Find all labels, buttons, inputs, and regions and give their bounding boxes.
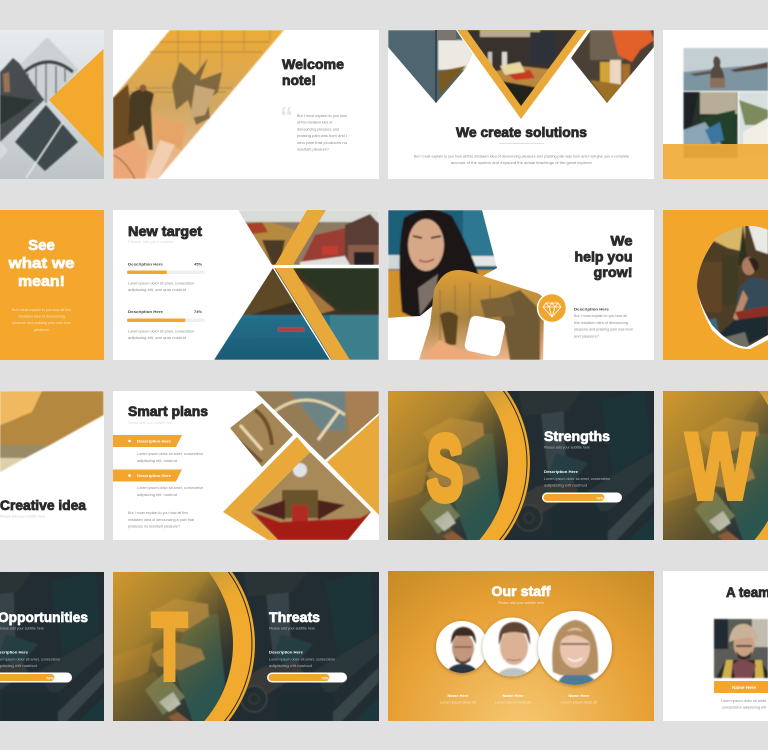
heading: what we xyxy=(7,255,74,272)
photo: white fence and foliage xyxy=(739,92,768,158)
letter S: S xyxy=(427,418,463,520)
panel: we create solutions slide xyxy=(388,30,654,179)
heading: We create solutions xyxy=(456,124,587,140)
text block: quote: who pain that produces no xyxy=(297,141,347,145)
names: Lorem ipsum dolor sit xyxy=(495,700,531,704)
icon: diamond in circle xyxy=(538,294,566,322)
heading: Opportunities xyxy=(0,609,88,625)
item 1: Description Here xyxy=(137,438,172,444)
shape: orange stripe bottom xyxy=(275,268,350,360)
photo: town rooftops xyxy=(238,210,379,265)
shape: white blob ring xyxy=(697,227,768,349)
text block: and pleasure? xyxy=(574,334,599,338)
heading: grow! xyxy=(594,264,632,280)
subtitle: Please add your subtitle here xyxy=(0,514,45,518)
panel: creative idea slide xyxy=(0,391,104,540)
photo: left triangle xyxy=(388,30,478,105)
shape: orange overlay band xyxy=(663,144,768,179)
item 1 xyxy=(113,435,204,463)
text block: pleasure and praising pain was born xyxy=(12,321,71,325)
text block: Lorem ipsum dolor sit amet, xyxy=(721,699,767,703)
shape: white rounded square xyxy=(464,315,506,357)
description: adipiscing elit nostrud xyxy=(269,664,312,668)
panel: our staff slide xyxy=(388,571,654,721)
text block: But I must explain to you how all this xyxy=(12,308,71,312)
heading: Creative idea xyxy=(0,497,86,513)
progress item 45%: Description Here xyxy=(128,262,164,266)
panel: photo collage slide xyxy=(663,30,768,179)
heading: mean! xyxy=(18,273,65,290)
text block: quote: But I must explain to you how xyxy=(297,114,347,118)
text block: quote: praising pain was born and I xyxy=(297,134,347,138)
shape: orange band xyxy=(223,437,310,540)
shape: orange triangle xyxy=(49,49,104,158)
heading: See xyxy=(28,237,55,254)
names: Lorem ipsum dolor sit xyxy=(561,700,597,704)
text block: produces no resultant pleasure? xyxy=(128,524,180,528)
letter T: T xyxy=(152,594,187,699)
panel: strengths slide xyxy=(388,391,654,540)
progress bar: 76% xyxy=(596,496,604,500)
photo: man in forest xyxy=(695,224,768,350)
item 2: Description Here xyxy=(137,473,172,478)
heading: We xyxy=(610,232,633,248)
item 2: adipiscing elit, nostrud xyxy=(137,493,177,497)
portrait: man with hat xyxy=(714,619,768,678)
progress bar xyxy=(0,672,72,682)
shape: gold chevron xyxy=(457,30,587,119)
progress bar xyxy=(267,672,347,682)
text block xyxy=(12,308,71,332)
text block: But I must explain to you how all this mistaken idea of denouncing pleasure and praising pain was born and I will give you a complete xyxy=(414,154,629,158)
text block: mistaken idea of denouncing xyxy=(18,314,65,318)
text block: But I must explain to you how all xyxy=(574,314,627,318)
item 2 xyxy=(113,470,204,497)
heading: Threats xyxy=(269,609,320,625)
heading: New target xyxy=(128,223,202,239)
progress item 74% xyxy=(127,309,205,340)
panel: a team slide xyxy=(663,571,768,721)
subtitle: Please add your subtitle xyxy=(128,240,174,244)
progress item 45%: adipiscing elit, sed quia nostrud xyxy=(128,288,186,292)
panel: new target slide xyxy=(113,210,379,360)
item 1: adipiscing elit, nostrud xyxy=(137,459,177,463)
progress item 74%: Description Here xyxy=(128,309,164,314)
text block: mistaken idea of denouncing a pain that xyxy=(128,518,195,522)
shape: orange stripe top xyxy=(275,210,326,265)
panel: opportunities slide xyxy=(0,572,104,721)
names: Name Here xyxy=(448,693,469,698)
subtitle: Please add your subtitle here xyxy=(498,601,544,605)
progress bar xyxy=(542,492,622,502)
panel: we help you grow slide xyxy=(388,210,654,360)
description xyxy=(544,469,611,488)
panel: threats slide xyxy=(113,572,379,721)
photo: cathedral arches xyxy=(230,403,295,468)
progress bar: 76% xyxy=(46,676,54,680)
photo: orange tinted blob xyxy=(415,268,550,360)
progress item 74%: 74% xyxy=(194,309,202,314)
photo: cathedral nave xyxy=(250,452,372,542)
text block xyxy=(574,306,633,338)
names: Lorem ipsum dolor sit xyxy=(440,700,476,704)
description: Description Here xyxy=(544,469,579,474)
subtitle: Please add your subtitle here xyxy=(544,446,590,450)
heading xyxy=(574,232,633,280)
heading: Welcome xyxy=(282,56,344,72)
photo: food stall centre triangle xyxy=(467,30,577,110)
text block xyxy=(128,511,195,528)
names: Name Here xyxy=(503,693,524,698)
description: Description Here xyxy=(269,650,304,654)
progress item 45% xyxy=(127,262,205,292)
text block: Description Here xyxy=(574,306,610,312)
label band: Name Here xyxy=(732,685,756,690)
text block: this mistaken idea of denouncing xyxy=(574,321,628,325)
text block: pleasure xyxy=(34,328,49,332)
text block: quote: denouncing pleasure and xyxy=(297,128,339,132)
heading xyxy=(7,237,74,290)
names xyxy=(440,693,597,704)
description: Lorem ipsum dolor sit amet, consectetur xyxy=(544,477,611,481)
photo: stone stack xyxy=(684,48,768,91)
progress item 74%: adipiscing elit, sed quia nostrud xyxy=(128,336,186,340)
text block xyxy=(414,154,629,165)
progress item 45%: Lorem ipsum dolor sit amet, consectetur xyxy=(128,282,195,286)
panel: see what we mean slide xyxy=(0,210,104,360)
text block xyxy=(721,699,767,710)
label band xyxy=(714,681,768,693)
photo: cathedral ceiling xyxy=(255,391,379,461)
shape: orange triangle right xyxy=(327,415,379,515)
panel: harbour bridge slide xyxy=(0,30,104,179)
panel: man on rocks slide xyxy=(663,210,768,360)
progress item 74%: Lorem ipsum dolor sit amet, consectetur xyxy=(128,330,195,334)
item 1: Lorem ipsum dolor sit amet, consectetur xyxy=(137,452,204,456)
photo: orange tinted greenhouse xyxy=(113,30,284,179)
progress bar: 76% xyxy=(321,676,329,680)
item 2: Lorem ipsum dolor sit amet, consectetur xyxy=(137,486,204,490)
photo: sauce bottles right triangle xyxy=(571,30,654,105)
heading: Strengths xyxy=(544,428,610,444)
photo: woman portrait xyxy=(388,209,503,320)
text block: quote: all this mistaken idea of xyxy=(297,120,333,124)
heading: Smart plans xyxy=(128,403,208,419)
heading xyxy=(282,56,344,88)
portrait: man with glasses xyxy=(436,621,488,675)
subtitle: Please add your subtitle here xyxy=(269,626,315,630)
names: Name Here xyxy=(569,693,590,698)
heading: Our staff xyxy=(492,583,551,599)
panel: smart plans slide xyxy=(113,391,379,540)
icon: quote mark: “ xyxy=(280,101,293,131)
description xyxy=(269,650,336,668)
photo: bridge diamonds xyxy=(0,37,79,178)
text block: consectetur adipiscing elit xyxy=(722,706,767,710)
progress item 45%: 45% xyxy=(194,262,202,266)
panel: weaknesses slide xyxy=(663,391,768,540)
description: Lorem ipsum dolor sit amet, consectetur xyxy=(269,658,336,662)
text block: quote: resultant pleasure? xyxy=(297,148,329,152)
portrait: woman with glasses xyxy=(538,611,612,690)
description: adipiscing elit nostrud xyxy=(544,484,587,488)
heading: help you xyxy=(574,248,632,264)
photo: forest lake xyxy=(214,268,379,360)
text block: But I must explain to you how all this xyxy=(128,511,188,515)
panel: welcome note slide xyxy=(113,30,379,179)
photo: tinted mountain xyxy=(0,391,104,472)
heading: note! xyxy=(282,72,316,88)
description xyxy=(0,650,61,668)
text block: quote xyxy=(297,114,347,152)
subtitle: Please add your subtitle here xyxy=(128,421,173,425)
text block: account of the system and expound the actual teachings of the great explorer xyxy=(451,161,593,165)
photo: plants and jeans xyxy=(684,92,738,158)
text block: pleasure and praising pain was born xyxy=(574,328,633,332)
portrait: young man xyxy=(482,618,542,680)
